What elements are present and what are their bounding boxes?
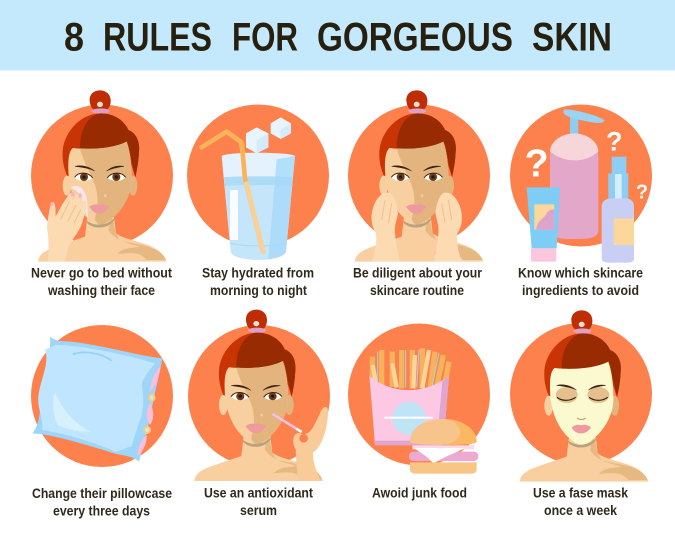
illustration: woman washing face xyxy=(38,90,167,262)
panel: stay hydrated xyxy=(187,104,329,298)
question marks xyxy=(525,126,648,203)
question marks: ? xyxy=(606,126,622,156)
caption: skincare routine xyxy=(370,282,464,298)
circle background xyxy=(510,104,652,246)
question marks: ? xyxy=(525,142,549,186)
caption: once a week xyxy=(544,502,617,518)
panel: skincare ingredients xyxy=(510,104,652,298)
title: FOR xyxy=(232,16,298,60)
caption: washing their face xyxy=(47,282,155,298)
illustration: woman with hands on cheeks xyxy=(355,90,483,262)
circle background xyxy=(348,104,490,246)
caption: Be diligent about your xyxy=(353,264,482,280)
caption: Change their pillowcase xyxy=(32,485,172,501)
panel: junk food xyxy=(348,324,490,500)
caption: morning to night xyxy=(210,282,307,298)
caption: Use an antioxidant xyxy=(204,484,313,500)
caption: ingredients to avoid xyxy=(522,282,639,298)
title: RULES xyxy=(103,16,212,60)
applicator xyxy=(273,414,296,429)
caption: Never go to bed without xyxy=(31,264,172,280)
panel: face mask xyxy=(510,310,652,518)
circle background xyxy=(348,324,490,466)
circle background xyxy=(188,325,330,467)
question marks: ? xyxy=(636,181,648,203)
panel: skincare routine xyxy=(348,90,490,298)
illustration: fries and burger xyxy=(369,348,478,474)
caption: Know which skincare xyxy=(518,264,643,280)
caption: Stay hydrated from xyxy=(202,264,314,280)
hands xyxy=(371,193,400,262)
circle background xyxy=(31,325,173,467)
caption: every three days xyxy=(53,502,150,518)
caption: serum xyxy=(240,502,277,518)
foam on cheek xyxy=(71,186,88,218)
panel: antioxidant serum xyxy=(188,310,330,518)
header banner xyxy=(0,0,675,70)
title: 8 xyxy=(64,16,84,60)
panel: pillowcase xyxy=(31,325,173,518)
title: SKIN xyxy=(532,16,612,60)
caption: Use a fase mask xyxy=(533,484,628,500)
title: GORGEOUS xyxy=(317,16,513,60)
illustration: woman with face mask xyxy=(520,310,648,482)
caption: Awoid junk food xyxy=(372,484,467,500)
illustration: pillow xyxy=(32,337,162,462)
illustration: woman applying serum xyxy=(194,310,328,481)
circle background xyxy=(31,104,173,246)
panel: wash face xyxy=(31,90,173,298)
hand xyxy=(47,193,86,262)
illustration: glass with straw and ice xyxy=(200,117,295,260)
circle background xyxy=(510,323,652,465)
hand xyxy=(293,407,328,481)
circle background xyxy=(187,104,329,246)
illustration: skincare bottles and question marks xyxy=(525,109,648,263)
